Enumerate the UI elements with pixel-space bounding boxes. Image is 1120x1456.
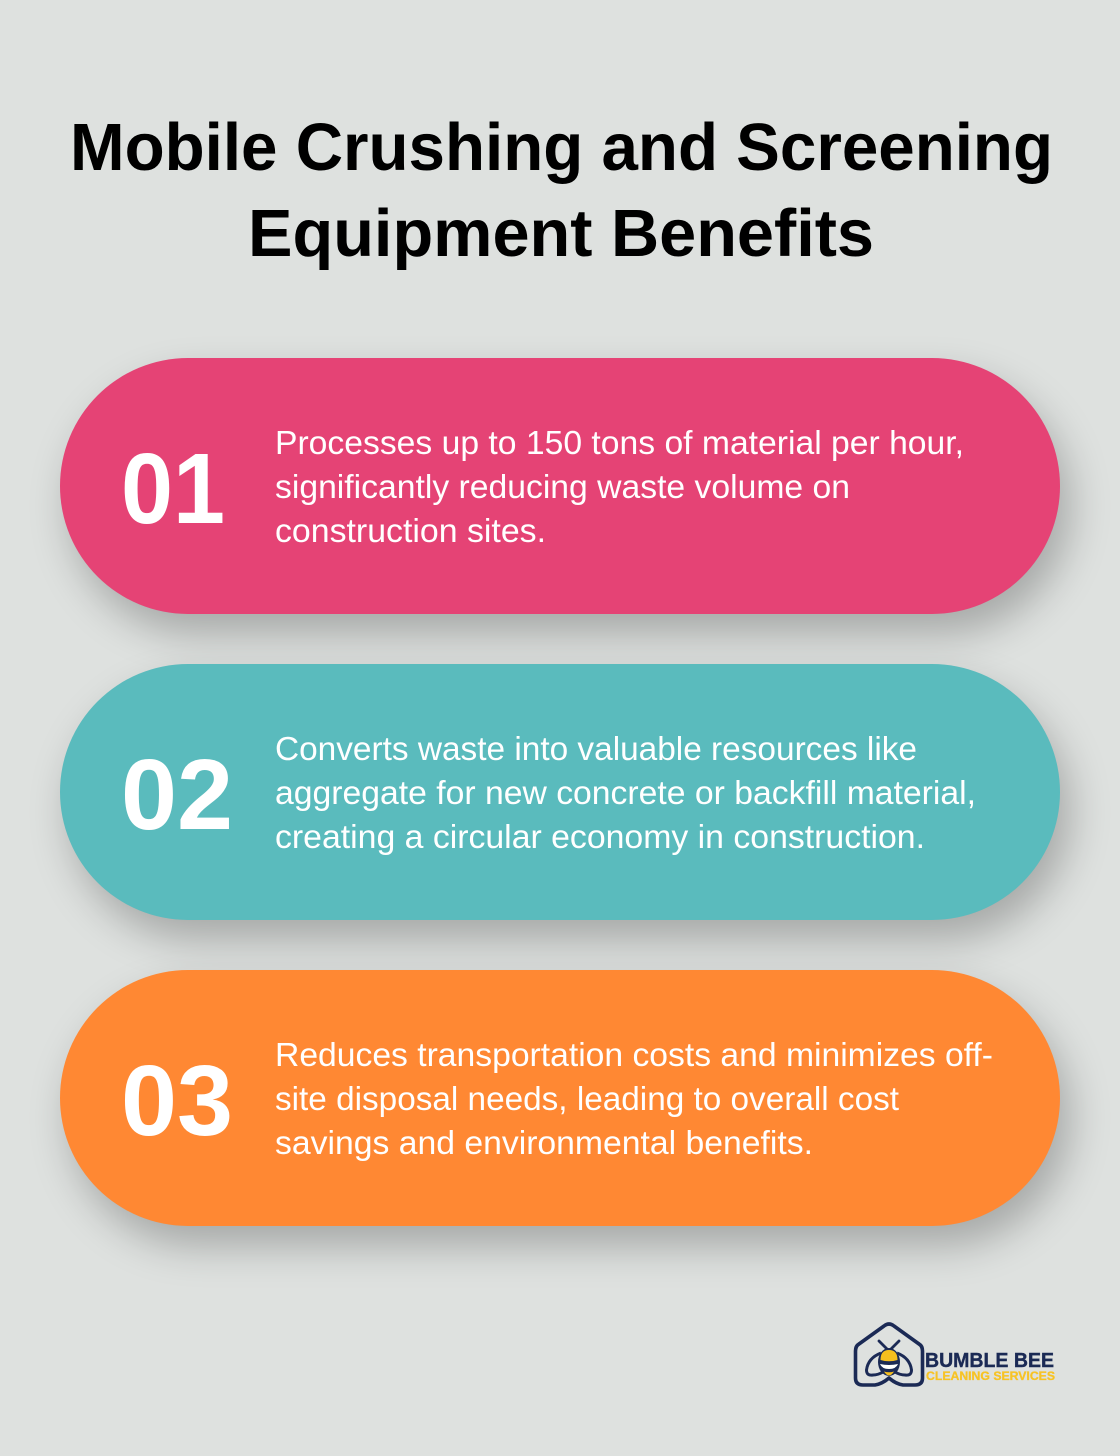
icon: bee (866, 1341, 912, 1376)
text: benefit 01: significantly reducing waste volume on (275, 468, 850, 505)
logo wordmark: BUMBLE BEE (925, 1349, 1054, 1372)
text: benefit 02: creating a circular economy in construction. (275, 818, 925, 855)
text: benefit 03: Reduces transportation costs and minimizes off- (275, 1036, 993, 1073)
title: Equipment Benefits (248, 196, 874, 271)
text: benefit 03: savings and environmental benefits. (275, 1124, 813, 1161)
text: benefit 02: Converts waste into valuable resources like (275, 730, 917, 767)
number 03: 03 (121, 1045, 233, 1157)
title (70, 110, 1053, 271)
text: benefit 01 (275, 424, 964, 549)
number 02: 02 (121, 739, 233, 851)
logo: Bumble Bee Cleaning Services (856, 1324, 1055, 1385)
panel: benefit 01 background (60, 358, 1060, 614)
text: benefit 03: site disposal needs, leading to overall cost (275, 1080, 899, 1117)
text: benefit 02 (275, 730, 976, 855)
number 01: 01 (121, 433, 225, 545)
text: benefit 03 (275, 1036, 993, 1161)
icon: house outline (856, 1324, 922, 1385)
text: benefit 02: aggregate for new concrete or backfill material, (275, 774, 976, 811)
text: benefit 01: construction sites. (275, 512, 546, 549)
panel: benefit 02 background (60, 664, 1060, 920)
title: Mobile Crushing and Screening (70, 110, 1053, 185)
logo tagline: CLEANING SERVICES (926, 1369, 1055, 1383)
text: benefit 01: Processes up to 150 tons of material per hour, (275, 424, 964, 461)
panel: benefit 03 background (60, 970, 1060, 1226)
